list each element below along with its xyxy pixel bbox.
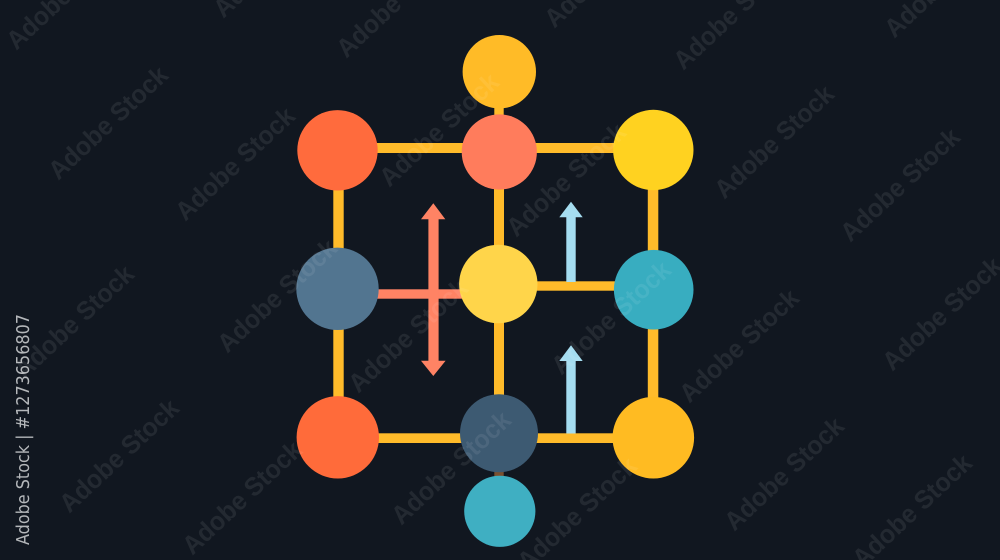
node: top amber <box>463 35 536 108</box>
watermark pattern: Adobe Stock <box>373 66 505 192</box>
connector: salmon link <box>372 289 464 299</box>
watermark pattern: Adobe Stock <box>708 78 840 204</box>
watermark pattern: Adobe Stock <box>385 404 517 530</box>
watermark pattern: Adobe Stock <box>42 59 174 185</box>
watermark pattern: Adobe Stock <box>673 282 805 408</box>
watermark pattern: Adobe Stock <box>718 410 850 536</box>
node: top-left orange <box>297 110 378 190</box>
node: centre yellow <box>459 245 538 323</box>
watermark pattern: Adobe Stock <box>53 392 185 518</box>
arrow: salmon double-headed <box>421 203 446 376</box>
node: bottom-centre navy <box>460 394 538 472</box>
connector: brown link <box>494 468 504 480</box>
node: middle-right teal <box>614 250 694 330</box>
connector lines <box>333 100 658 443</box>
node: top-right yellow <box>613 110 694 190</box>
watermark pattern: Adobe Stock <box>500 116 632 242</box>
watermark pattern: Adobe Stock <box>211 232 343 358</box>
arrow: light blue upper <box>559 202 583 282</box>
watermark pattern: Adobe Stock <box>834 121 966 247</box>
node: top-centre coral <box>462 114 537 190</box>
watermark pattern: Adobe Stock <box>545 254 677 380</box>
arrow: light blue lower <box>559 345 583 434</box>
watermark pattern: Adobe Stock <box>8 258 140 384</box>
node: middle-left slate <box>296 248 379 330</box>
node: bottom teal <box>464 476 535 547</box>
watermark pattern: Adobe Stock <box>342 272 474 398</box>
watermark pattern: Adobe Stock <box>169 100 301 226</box>
vertical stock credit: Adobe Stock | #1273656807 <box>13 314 34 545</box>
node: bottom-left orange <box>297 396 379 478</box>
watermark pattern: Adobe Stock <box>176 434 308 560</box>
node: bottom-right amber <box>612 397 694 479</box>
